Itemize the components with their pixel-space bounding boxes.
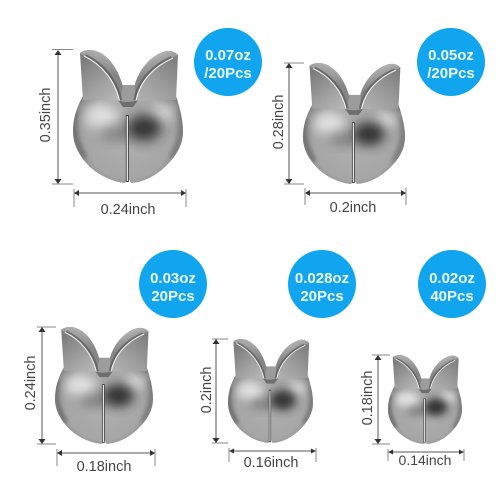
horizontal dimension 0.24inch: 0.24inch <box>101 202 155 218</box>
sinker 0.05oz <box>301 63 407 186</box>
horizontal dimension 0.24inch <box>74 189 186 218</box>
vertical dimension 0.24inch: 0.24inch <box>23 356 39 410</box>
horizontal dimension 0.14inch: 0.14inch <box>399 452 451 468</box>
horizontal dimension 0.16inch: 0.16inch <box>244 455 298 471</box>
badge 0.07oz /20Pcs: /20Pcs <box>204 65 252 82</box>
horizontal dimension 0.18inch <box>57 449 155 475</box>
badge 0.07oz /20Pcs <box>194 28 262 96</box>
horizontal dimension 0.16inch <box>229 448 316 471</box>
vertical dimension 0.18inch: 0.18inch <box>360 371 376 425</box>
badge 0.02oz 40Pcs <box>418 250 486 318</box>
badge 0.07oz /20Pcs: 0.07oz <box>205 47 251 64</box>
vertical dimension 0.35inch: 0.35inch <box>38 88 54 142</box>
vertical dimension 0.2inch <box>199 339 228 443</box>
sinker 0.03oz <box>53 327 155 446</box>
badge 0.028oz 20Pcs: 0.028oz <box>295 270 349 287</box>
badge 0.05oz /20Pcs <box>417 28 485 96</box>
badge 0.028oz 20Pcs: 20Pcs <box>300 288 344 305</box>
badge 0.03oz 20Pcs <box>139 250 207 318</box>
horizontal dimension 0.2inch <box>305 188 406 216</box>
vertical dimension 0.28inch <box>271 63 304 184</box>
badge 0.03oz 20Pcs: 0.03oz <box>150 270 196 287</box>
badge 0.028oz 20Pcs <box>288 250 356 318</box>
horizontal dimension 0.14inch <box>388 449 464 468</box>
badge 0.05oz /20Pcs: 0.05oz <box>428 47 474 64</box>
badge 0.05oz /20Pcs: /20Pcs <box>427 65 475 82</box>
sinker 0.028oz <box>226 339 315 445</box>
sinker 0.07oz <box>71 50 185 185</box>
vertical dimension 0.35inch <box>38 50 73 184</box>
horizontal dimension 0.2inch: 0.2inch <box>330 200 376 216</box>
sinker 0.02oz <box>387 355 463 445</box>
vertical dimension 0.24inch <box>23 327 56 444</box>
badge 0.02oz 40Pcs: 40Pcs <box>430 288 474 305</box>
vertical dimension 0.28inch: 0.28inch <box>271 95 287 149</box>
badge 0.03oz 20Pcs: 20Pcs <box>151 288 195 305</box>
vertical dimension 0.18inch <box>360 355 390 444</box>
vertical dimension 0.2inch: 0.2inch <box>199 367 215 413</box>
badge 0.02oz 40Pcs: 0.02oz <box>429 270 475 287</box>
horizontal dimension 0.18inch: 0.18inch <box>77 459 131 475</box>
